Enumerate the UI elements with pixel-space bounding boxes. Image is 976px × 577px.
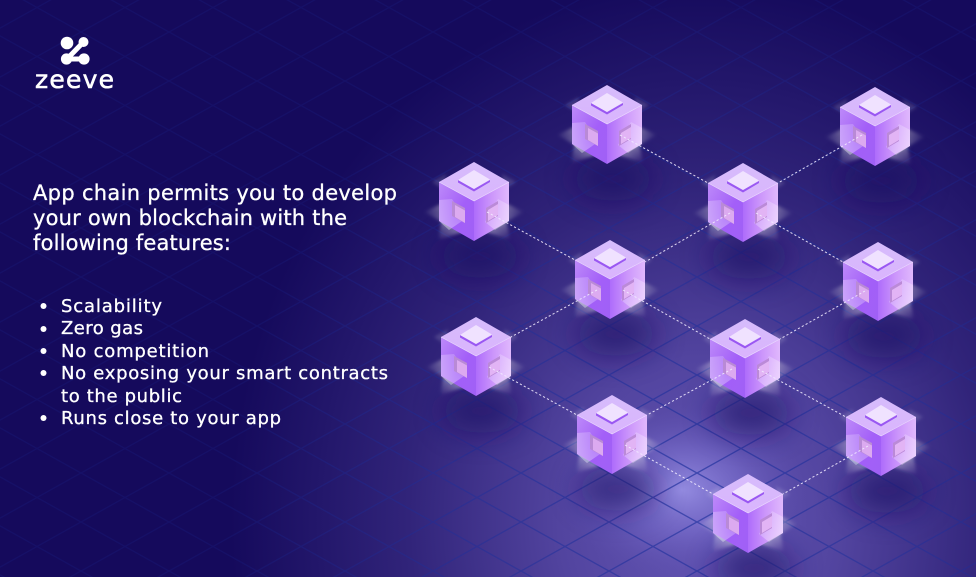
icon: zeeve mark (61, 37, 90, 65)
dashed connectors (487, 135, 868, 494)
cube node 7 (426, 317, 526, 433)
heading: App chain permits you to develop (33, 181, 397, 205)
cube node 6 (828, 242, 928, 358)
cube node 11 (698, 474, 798, 577)
feature list: No competition (61, 341, 209, 362)
logo: zeeve (35, 37, 114, 94)
heading: your own blockchain with the (33, 206, 347, 230)
feature list (40, 296, 388, 429)
cube node 2 (825, 87, 925, 203)
heading: following features: (33, 231, 231, 255)
feature list: Zero gas (61, 318, 143, 339)
wordmark: zeeve (35, 65, 114, 94)
cube node 8 (695, 319, 795, 435)
cube node 5 (560, 240, 660, 356)
cube node 10 (831, 397, 931, 513)
blockchain node network (424, 85, 931, 577)
cube node 4 (693, 163, 793, 279)
feature list: to the public (61, 386, 182, 407)
cube node 9 (562, 395, 662, 511)
feature list: Scalability (61, 296, 162, 317)
cube node 1 (557, 85, 657, 201)
feature list: No exposing your smart contracts (61, 363, 388, 384)
heading (33, 181, 397, 255)
cube node 3 (424, 162, 524, 278)
feature list: Runs close to your app (61, 408, 281, 429)
